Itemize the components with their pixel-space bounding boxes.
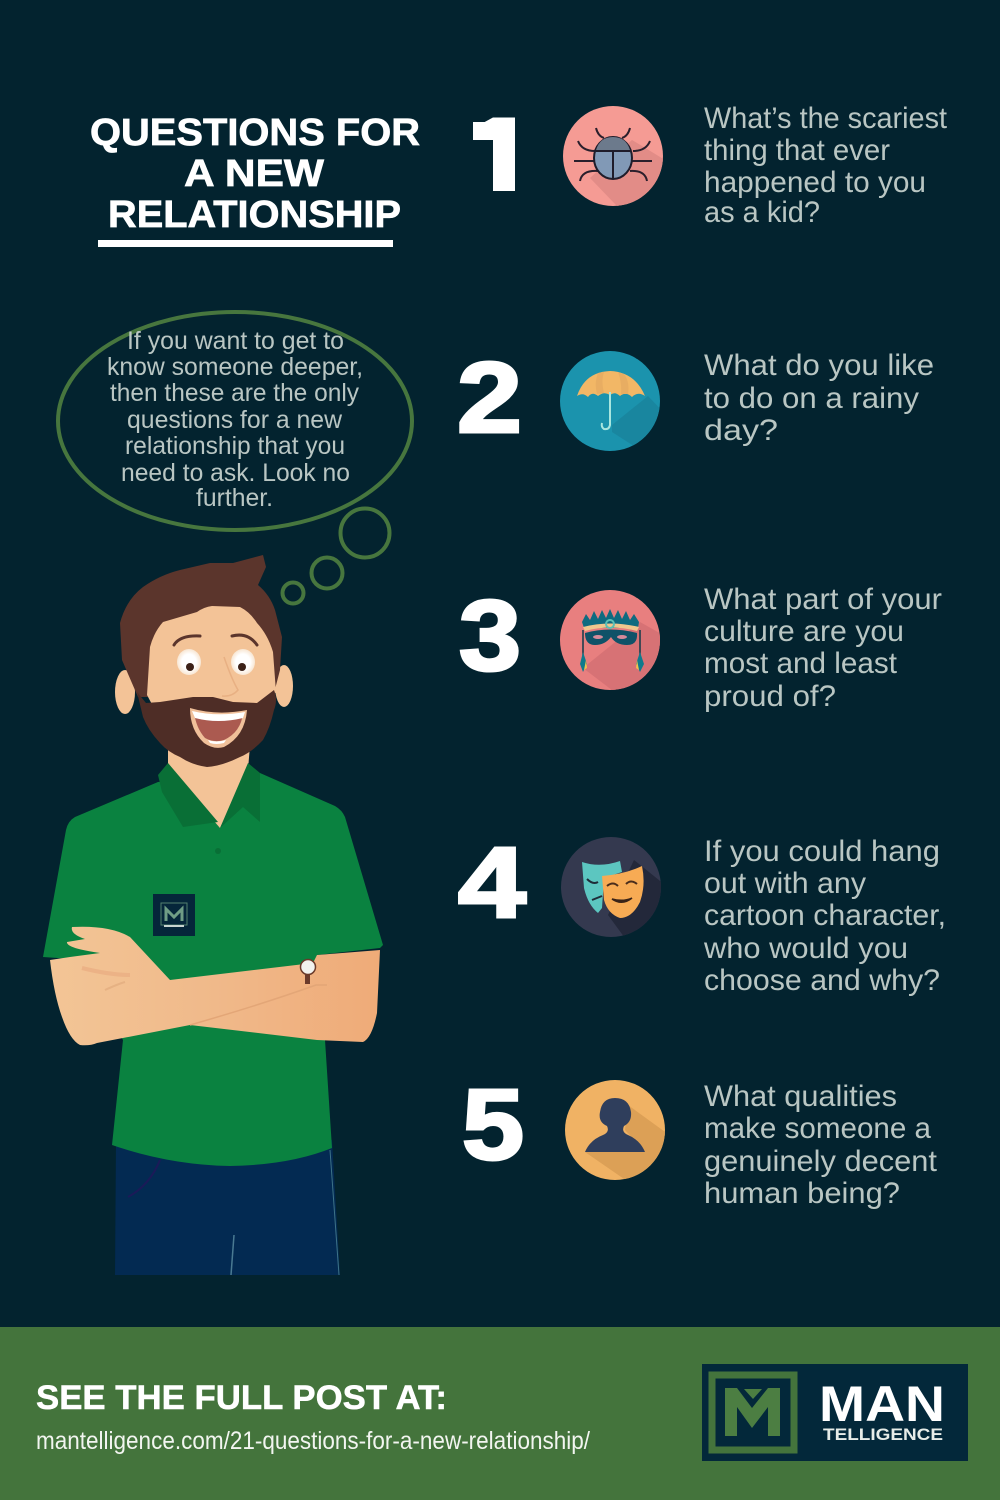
icon: umbrella xyxy=(560,351,660,451)
question text: day? xyxy=(704,414,778,447)
icon: masquerade mask xyxy=(560,590,660,690)
hair xyxy=(120,555,282,697)
question text: who would you xyxy=(703,932,908,965)
shirt placket button xyxy=(215,848,221,854)
question 3 xyxy=(460,588,942,712)
number 3: 3 xyxy=(459,580,521,692)
thought bubble: need to ask. Look no xyxy=(121,459,350,487)
neck xyxy=(168,745,250,828)
beard xyxy=(137,690,276,767)
icon: person silhouette xyxy=(565,1080,665,1180)
question text xyxy=(703,835,946,997)
question text: most and least xyxy=(704,647,898,680)
question text xyxy=(704,583,942,713)
footer url: mantelligence.com/21-questions-for-a-new-relationship/ xyxy=(36,1427,590,1455)
title: A NEW xyxy=(184,153,324,195)
face xyxy=(147,606,276,710)
question 4 xyxy=(458,827,946,997)
number 5: 5 xyxy=(462,1069,524,1181)
collar xyxy=(158,763,260,828)
thought bubble: If you want to get to xyxy=(127,327,344,355)
question text: cartoon character, xyxy=(704,899,946,932)
number 4: 4 xyxy=(458,827,526,939)
thought bubble: know someone deeper, xyxy=(107,353,363,381)
number 1: 1 xyxy=(466,101,532,213)
icon: beetle xyxy=(563,106,663,206)
question text: What part of your xyxy=(704,583,942,616)
logo: Mantelligence: TELLIGENCE xyxy=(823,1425,943,1444)
wristwatch xyxy=(300,960,316,984)
title: RELATIONSHIP xyxy=(108,194,401,236)
question 1 xyxy=(473,106,947,222)
thought bubble: then these are the only xyxy=(110,379,359,407)
eyebrows xyxy=(174,635,257,645)
question text: genuinely decent xyxy=(704,1145,938,1178)
logo: Mantelligence xyxy=(702,1364,968,1461)
icon: theatre masks xyxy=(561,837,661,937)
character: bearded man xyxy=(43,555,383,1275)
question text: proud of? xyxy=(704,680,836,713)
thought bubble xyxy=(58,312,412,604)
question text: as a kid? xyxy=(704,196,820,229)
question text: If you could hang xyxy=(704,835,940,868)
logo: Mantelligence: MAN xyxy=(819,1376,945,1432)
eyes xyxy=(177,649,255,675)
question text: make someone a xyxy=(704,1112,931,1145)
number 1 xyxy=(473,118,515,191)
question text: human being? xyxy=(704,1177,900,1210)
question text: happened to you xyxy=(704,166,926,199)
question text xyxy=(704,102,948,229)
question text: to do on a rainy xyxy=(704,382,919,415)
title: QUESTIONS FOR xyxy=(90,112,420,154)
thought bubble: questions for a new xyxy=(127,406,343,434)
crossed arms xyxy=(50,927,380,1045)
shirt xyxy=(43,773,383,1166)
thought bubble: relationship that you xyxy=(125,432,345,460)
title xyxy=(90,112,420,247)
question 2 xyxy=(459,351,933,451)
question text: choose and why? xyxy=(704,964,940,997)
question text xyxy=(704,349,934,447)
nose xyxy=(222,657,238,696)
mouth xyxy=(190,708,247,748)
pants xyxy=(115,1140,340,1275)
question text: What’s the scariest xyxy=(704,102,948,135)
question text: What qualities xyxy=(704,1080,897,1113)
question text: What do you like xyxy=(704,349,934,382)
question text: thing that ever xyxy=(704,134,890,167)
question 5 xyxy=(462,1069,938,1210)
number 2: 2 xyxy=(457,342,522,454)
question text: culture are you xyxy=(704,615,904,648)
question text: out with any xyxy=(704,867,866,900)
question text xyxy=(704,1080,938,1210)
thought bubble: further. xyxy=(196,484,273,512)
footer call to action: SEE THE FULL POST AT: xyxy=(36,1379,447,1417)
footer band xyxy=(0,1327,1000,1500)
shirt logo badge xyxy=(153,894,195,936)
ears xyxy=(115,665,293,714)
